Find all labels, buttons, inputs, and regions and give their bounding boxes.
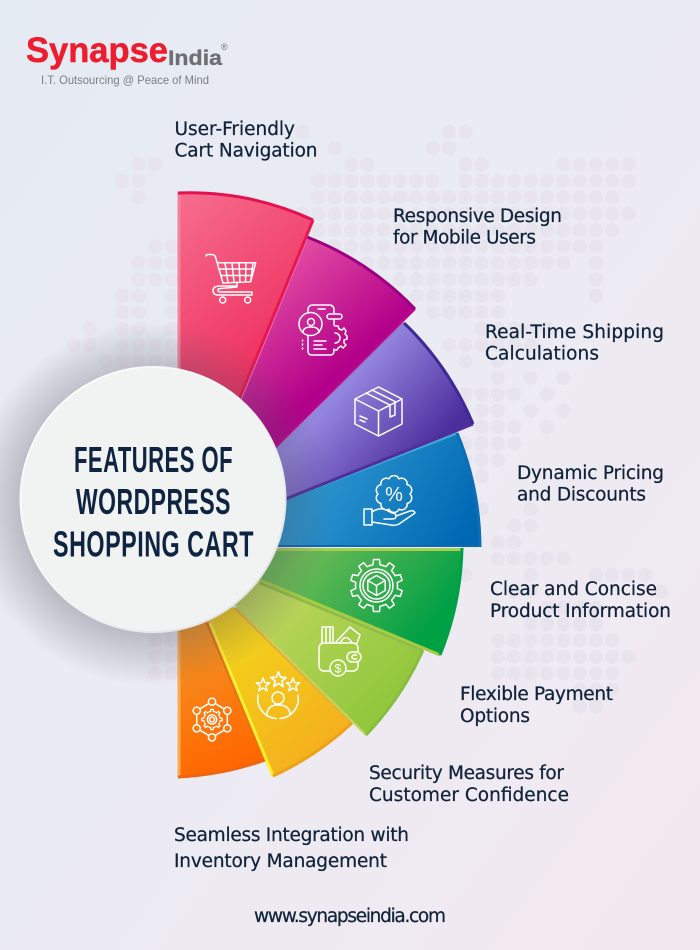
title: SHOPPING CART	[53, 524, 254, 564]
icon: wallet: $	[335, 662, 342, 676]
icon: star rating person	[256, 672, 300, 718]
title: FEATURES OF	[74, 439, 233, 480]
label: User-Friendly Cart Navigation	[174, 119, 318, 162]
icon: parcel box	[355, 387, 402, 436]
label: Responsive Design for Mobile Users: Responsive Design	[393, 206, 562, 227]
logo: SynapseIndia: Synapse	[26, 31, 168, 70]
panel: segment 2 magenta	[205, 237, 415, 498]
label: Clear and Concise Product Information: Product Information	[490, 601, 671, 622]
panel: segment 5 green	[200, 548, 462, 655]
label: Flexible Payment Options: Options	[460, 706, 530, 727]
label: Security Measures for Customer Confidence	[369, 763, 569, 806]
logo: SynapseIndia	[26, 31, 228, 87]
panel: segment 3 purple	[200, 323, 473, 533]
icon: discount hand: %	[385, 484, 403, 506]
circle shadow	[0, 322, 333, 686]
label: Responsive Design for Mobile Users	[393, 206, 562, 248]
panel: segment 6 lime	[200, 555, 423, 735]
panel: segment 7 yellow	[200, 600, 352, 776]
label: Clear and Concise Product Information: Clear and Concise	[490, 579, 657, 600]
label: Clear and Concise Product Information	[490, 579, 671, 622]
icon: product gear	[350, 560, 403, 612]
label: Security Measures for Customer Confidence: Customer Confidence	[369, 785, 569, 806]
label: User-Friendly Cart Navigation: User-Friendly	[174, 119, 295, 140]
label: Real-Time Shipping Calculations: Real-Time Shipping	[485, 322, 664, 343]
title: WORDPRESS	[76, 481, 231, 522]
icon: wallet	[319, 627, 361, 676]
panel: segment 4 blue	[200, 433, 480, 547]
logo: SynapseIndia: ®	[221, 42, 228, 52]
label: Real-Time Shipping Calculations	[485, 322, 664, 364]
logo: SynapseIndia: India	[168, 47, 222, 70]
title	[53, 439, 254, 564]
label: Responsive Design for Mobile Users: for Mobile Users	[393, 228, 536, 248]
label: User-Friendly Cart Navigation: Cart Navigation	[174, 140, 318, 162]
label: Real-Time Shipping Calculations: Calculations	[485, 344, 599, 364]
panel: segment 8 orange	[178, 600, 265, 777]
icon: mobile user	[299, 305, 347, 355]
label: Dynamic Pricing and Discounts: and Discounts	[517, 484, 646, 506]
label: Security Measures for Customer Confidence: Security Measures for	[369, 763, 564, 784]
panel: central title circle	[20, 367, 286, 632]
label: Dynamic Pricing and Discounts: Dynamic Pricing	[517, 463, 664, 484]
label: Seamless Integration with Inventory Management	[174, 825, 409, 872]
panel: segment 1 red	[178, 192, 313, 480]
icon: discount hand	[364, 476, 415, 525]
label: Seamless Integration with Inventory Management: Seamless Integration with	[174, 825, 409, 846]
label: Seamless Integration with Inventory Management: Inventory Management	[174, 851, 387, 872]
icon: network gear	[193, 698, 231, 741]
label: Flexible Payment Options	[460, 684, 613, 727]
label: Flexible Payment Options: Flexible Payment	[460, 684, 613, 705]
icon: shopping cart	[206, 254, 256, 303]
logo: SynapseIndia: I.T. Outsourcing @ Peace of Mind	[41, 73, 209, 87]
footer url: www.synapseindia.com	[254, 906, 446, 927]
label: Dynamic Pricing and Discounts	[517, 463, 664, 506]
